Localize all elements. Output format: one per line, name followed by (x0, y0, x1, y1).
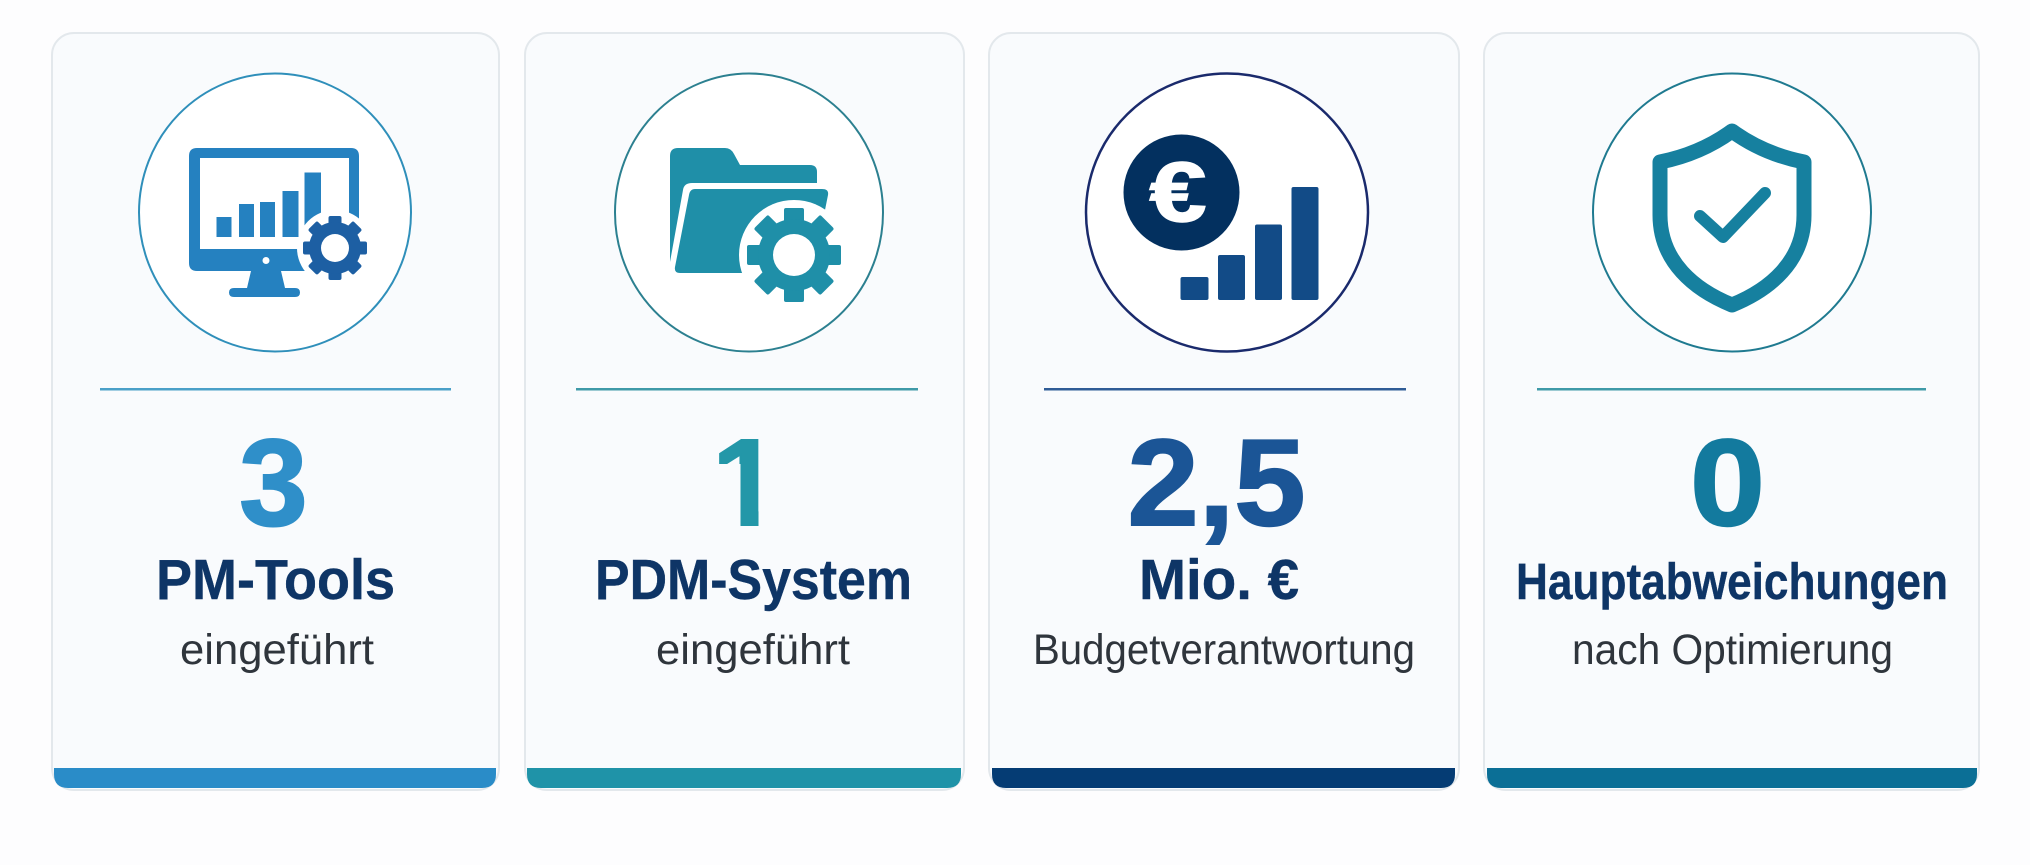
number: 1 (712, 415, 780, 552)
panel: Budget (989, 33, 1459, 790)
label: Hauptabweichungen (1516, 553, 1948, 610)
divider (576, 388, 918, 390)
bottom accent bar (54, 768, 496, 788)
bottom accent bar (527, 768, 961, 788)
bottom accent bar (1487, 768, 1977, 788)
card background (1484, 33, 1979, 790)
panel: PM-Tools (52, 33, 499, 790)
description: nach Optimierung (1572, 626, 1893, 674)
card background (989, 33, 1459, 790)
panel: Hauptabweichungen (1484, 33, 1979, 790)
divider (1044, 388, 1406, 390)
bottom accent bar (992, 768, 1455, 788)
icon: monitor with chart and gear (139, 74, 411, 352)
number: 2,5 (1128, 415, 1306, 552)
divider (100, 388, 451, 390)
icon: folder with gear (615, 74, 883, 352)
icon: euro coin and rising bars (1086, 74, 1368, 352)
icon: shield with check mark (1593, 74, 1871, 352)
number: 3 (239, 415, 308, 552)
card background (525, 33, 964, 790)
label: PDM-System (595, 548, 912, 612)
divider (1537, 388, 1926, 390)
label: PM-Tools (156, 548, 395, 612)
description: Budgetverantwortung (1033, 626, 1415, 674)
icon: euro coin and rising bars: € (1150, 145, 1206, 239)
card background (52, 33, 499, 790)
description: eingeführt (180, 626, 374, 674)
description: eingeführt (656, 626, 850, 674)
number: 0 (1690, 415, 1765, 552)
label: Mio. € (1139, 548, 1299, 612)
panel: PDM-System (525, 33, 964, 790)
